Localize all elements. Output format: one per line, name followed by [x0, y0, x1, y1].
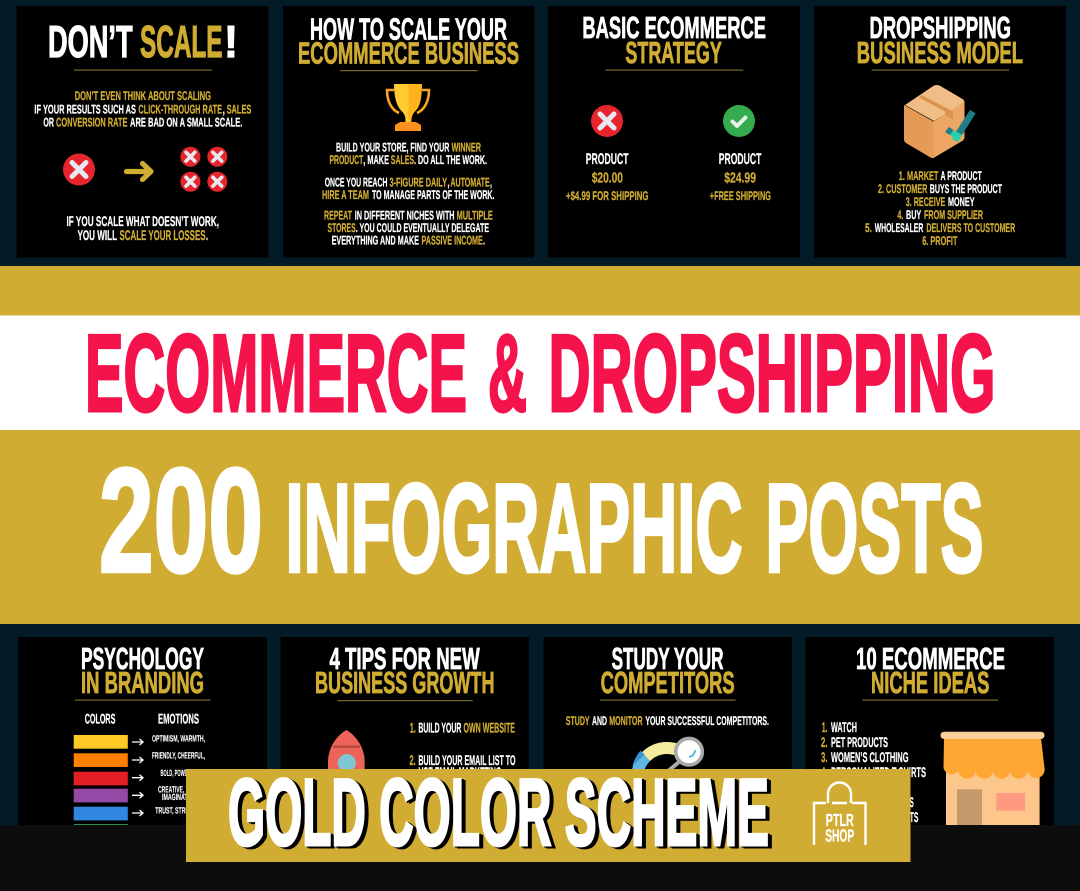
text block: study and monitor [566, 714, 769, 728]
white title band [0, 312, 1080, 435]
logo: ptlr shop bag [814, 782, 866, 846]
emotions list: BOLD, POWERFUL, [160, 768, 200, 778]
tips list: 1. [410, 720, 416, 736]
niche list: 1. [822, 719, 828, 735]
text block: product with paid shipping: PRODUCT [586, 151, 629, 168]
text block: scaling warning: , [222, 102, 225, 116]
text block: six-step model: 2. CUSTOMER [878, 182, 927, 196]
heading: basic ecommerce strategy: BASIC ECOMMERCE [582, 11, 766, 45]
heading: psychology in branding: IN BRANDING [81, 666, 204, 700]
text block: scaling steps: WINNER [452, 141, 481, 155]
text block: six-step model: A PRODUCT [940, 169, 982, 183]
niche list [821, 719, 926, 825]
gold band [0, 266, 1080, 624]
text block: six-step model: 4. [897, 208, 903, 222]
text block: six-step model: 1. MARKET [899, 169, 939, 183]
niche list: TS [910, 809, 918, 825]
text block: scaling steps [322, 141, 494, 247]
text block: scale losses: . [206, 227, 208, 243]
text block: six-step model: 6. PROFIT [922, 234, 958, 248]
text block: product with free shipping: $24.99 [724, 170, 756, 186]
icon: gauge with magnifier [632, 738, 702, 778]
text block: scaling steps: . DO ALL THE WORK. [414, 153, 487, 167]
text block: scaling steps: 3-FIGURE DAILY [390, 176, 447, 190]
text block: study and monitor: MONITOR [609, 714, 643, 728]
tips list: BUILD YOUR EMAIL LIST TO [418, 752, 516, 768]
text block: product with free shipping [710, 151, 771, 203]
emotions list: FRIENDLY, CHEERFUL, [152, 751, 205, 761]
text block: six-step model: 5. [865, 221, 872, 235]
text block: study and monitor: YOUR SUCCESSFUL COMPETITORS. [645, 714, 769, 728]
text block: scaling steps: PASSIVE INCOME [422, 233, 483, 247]
logo: ptlr shop bag: PTLR [826, 810, 854, 830]
panel: 4 tips for new business growth [281, 637, 529, 827]
column headers [85, 710, 199, 726]
arrows: color to emotion [132, 739, 143, 816]
icon: rocket [328, 730, 365, 782]
niche list: S [910, 794, 914, 810]
text block: scaling steps: SALES [391, 153, 414, 167]
tips list: OWN WEBSITE [464, 720, 515, 736]
text block: scaling steps: IN DIFFERENT NICHES WITH [355, 209, 454, 223]
text block: scaling warning: OR [43, 115, 54, 129]
text block: scale losses: YOU WILL [78, 227, 117, 243]
column headers: COLORS [85, 710, 115, 726]
color swatches [74, 735, 128, 827]
text block: product with free shipping: +FREE SHIPPING [710, 189, 771, 203]
logo: ptlr shop bag: SHOP [825, 826, 854, 846]
heading: study your competitors: COMPETITORS [601, 666, 735, 700]
panel: don't scale [16, 6, 268, 258]
icon: one failure multiplies into four [63, 147, 227, 192]
heading: 10 ecommerce niche ideas [856, 642, 1005, 700]
panel: psychology in branding [18, 637, 267, 827]
title: ecommerce and dropshipping: ECOMMERCE [85, 312, 467, 435]
panel: basic ecommerce strategy [548, 6, 800, 258]
text block: scaling steps: . [483, 233, 485, 247]
panel: 10 ecommerce niche ideas [806, 637, 1054, 827]
tips list: BUILD YOUR [418, 720, 461, 736]
title: ecommerce and dropshipping: & [488, 312, 527, 435]
panel: how to scale [283, 6, 534, 258]
text block: scaling steps: AUTOMATE [450, 176, 490, 190]
text block: six-step model: WHOLESALER [875, 221, 923, 235]
icon: trophy [387, 84, 429, 131]
icon: parcel box with check [904, 85, 976, 158]
text block: scaling warning [34, 89, 251, 129]
heading: study your competitors [601, 642, 735, 700]
bottom dark bar [0, 825, 1080, 891]
headline: 200 infographic posts: 200 [99, 438, 263, 604]
text block: scaling steps: . YOU COULD EVENTUALLY DELEGATE [356, 221, 489, 235]
niche list: 3. [821, 749, 828, 765]
text block: product with paid shipping: +$4.99 FOR SHIPPING [566, 189, 649, 203]
heading: 4 tips: 4 TIPS FOR NEW [330, 642, 480, 676]
emotions list: IMAGINATIVE [162, 792, 196, 802]
panel: study your competitors [544, 637, 792, 827]
text block: scaling warning: IF YOUR RESULTS SUCH AS [34, 102, 136, 116]
panel: dropshipping business model [814, 6, 1066, 258]
text block: scaling warning: ARE BAD ON A SMALL SCALE. [130, 115, 242, 129]
text block: six-step model: 3. RECEIVE [906, 195, 945, 209]
column headers: EMOTIONS [158, 710, 199, 726]
text block: scaling warning: SALES [227, 102, 251, 116]
text block: scale losses: IF YOU SCALE WHAT DOESN’T WORK, [66, 213, 219, 229]
text block: scaling steps: HIRE A TEAM [322, 188, 369, 202]
heading: don't scale: ! [224, 16, 238, 67]
text block: six-step model: FROM SUPPLIER [924, 208, 983, 222]
text block: six-step model: MONEY [948, 195, 975, 209]
heading: psychology in branding: PSYCHOLOGY [81, 642, 204, 676]
heading: how to scale: ECOMMERCE BUSINESS [298, 36, 519, 70]
heading: basic ecommerce strategy: STRATEGY [625, 36, 722, 70]
icon: green check [723, 105, 755, 137]
text block: six-step model [865, 169, 1015, 248]
headline: 200 infographic posts [99, 438, 984, 604]
text block: scale losses: SCALE YOUR LOSSES [120, 227, 206, 243]
heading: 10 ecommerce niche ideas: NICHE IDEAS [871, 666, 989, 700]
text block: scaling steps: , MAKE [363, 153, 389, 167]
text block: scaling steps: TO MANAGE PARTS OF THE WORK. [372, 188, 494, 202]
text block: six-step model: BUYS THE PRODUCT [930, 182, 1002, 196]
text block: scaling steps: , [490, 176, 492, 190]
niche list: WATCH [831, 719, 857, 735]
emotions list [152, 734, 205, 815]
text block: scaling warning: CONVERSION RATE [56, 115, 127, 129]
heading: basic ecommerce strategy [582, 11, 766, 70]
emotions list: OPTIMISM, WARMTH, [152, 734, 205, 744]
text block: scaling warning: CLICK-THROUGH RATE [138, 102, 222, 116]
text block: product with free shipping: PRODUCT [719, 151, 762, 168]
text block: study and monitor: AND [592, 714, 607, 728]
text block: scaling steps: STORES [328, 221, 356, 235]
heading: 4 tips: BUSINESS GROWTH [315, 666, 494, 700]
text block: scaling steps: MULTIPLE [457, 209, 493, 223]
emotions list: TRUST, STRENGTH, [155, 805, 205, 815]
text block: six-step model: BUY [906, 208, 922, 222]
niche list: WOMEN’S CLOTHING [831, 749, 909, 765]
heading: study your competitors: STUDY YOUR [612, 642, 724, 676]
tips list: 2. [410, 752, 416, 768]
heading: how to scale: HOW TO SCALE YOUR [310, 12, 507, 46]
text block: scaling steps: REPEAT [324, 209, 352, 223]
heading: psychology in branding [81, 642, 204, 700]
niche list: 2. [821, 734, 828, 750]
heading: don't scale: SCALE [140, 16, 222, 67]
text block: scaling steps: , [448, 176, 450, 190]
icon: red cross [591, 105, 623, 137]
text block: scaling steps: PRODUCT [330, 153, 363, 167]
heading: how to scale [298, 12, 519, 70]
niche list: PERSONALIZED T-SHIRTS [831, 764, 926, 780]
emotions list: CREATIVE, WISE, [158, 785, 200, 795]
text block: product with paid shipping: $20.00 [592, 170, 623, 186]
niche list: PET PRODUCTS [831, 734, 888, 750]
tips list: USE EMAIL MARKETING [418, 764, 501, 780]
tips list [410, 720, 516, 780]
text block: scaling steps: BUILD YOUR STORE, FIND YOUR [336, 141, 449, 155]
heading: 4 tips [315, 642, 494, 700]
text block: study and monitor: STUDY [566, 714, 590, 728]
text block: product with paid shipping [566, 151, 649, 203]
text block: scaling warning: DON’T EVEN THINK ABOUT SCALING [75, 89, 211, 103]
heading: don't scale: DON’T [48, 16, 133, 67]
text block: scaling steps: ONCE YOU REACH [325, 176, 387, 190]
icon: storefront [940, 732, 1045, 827]
text block: scale losses [66, 213, 219, 243]
heading: dropshipping business model [857, 11, 1023, 70]
gold color scheme banner [186, 760, 910, 866]
niche list: 4. [821, 764, 828, 780]
text block: scaling steps: EVERYTHING AND MAKE [332, 233, 419, 247]
